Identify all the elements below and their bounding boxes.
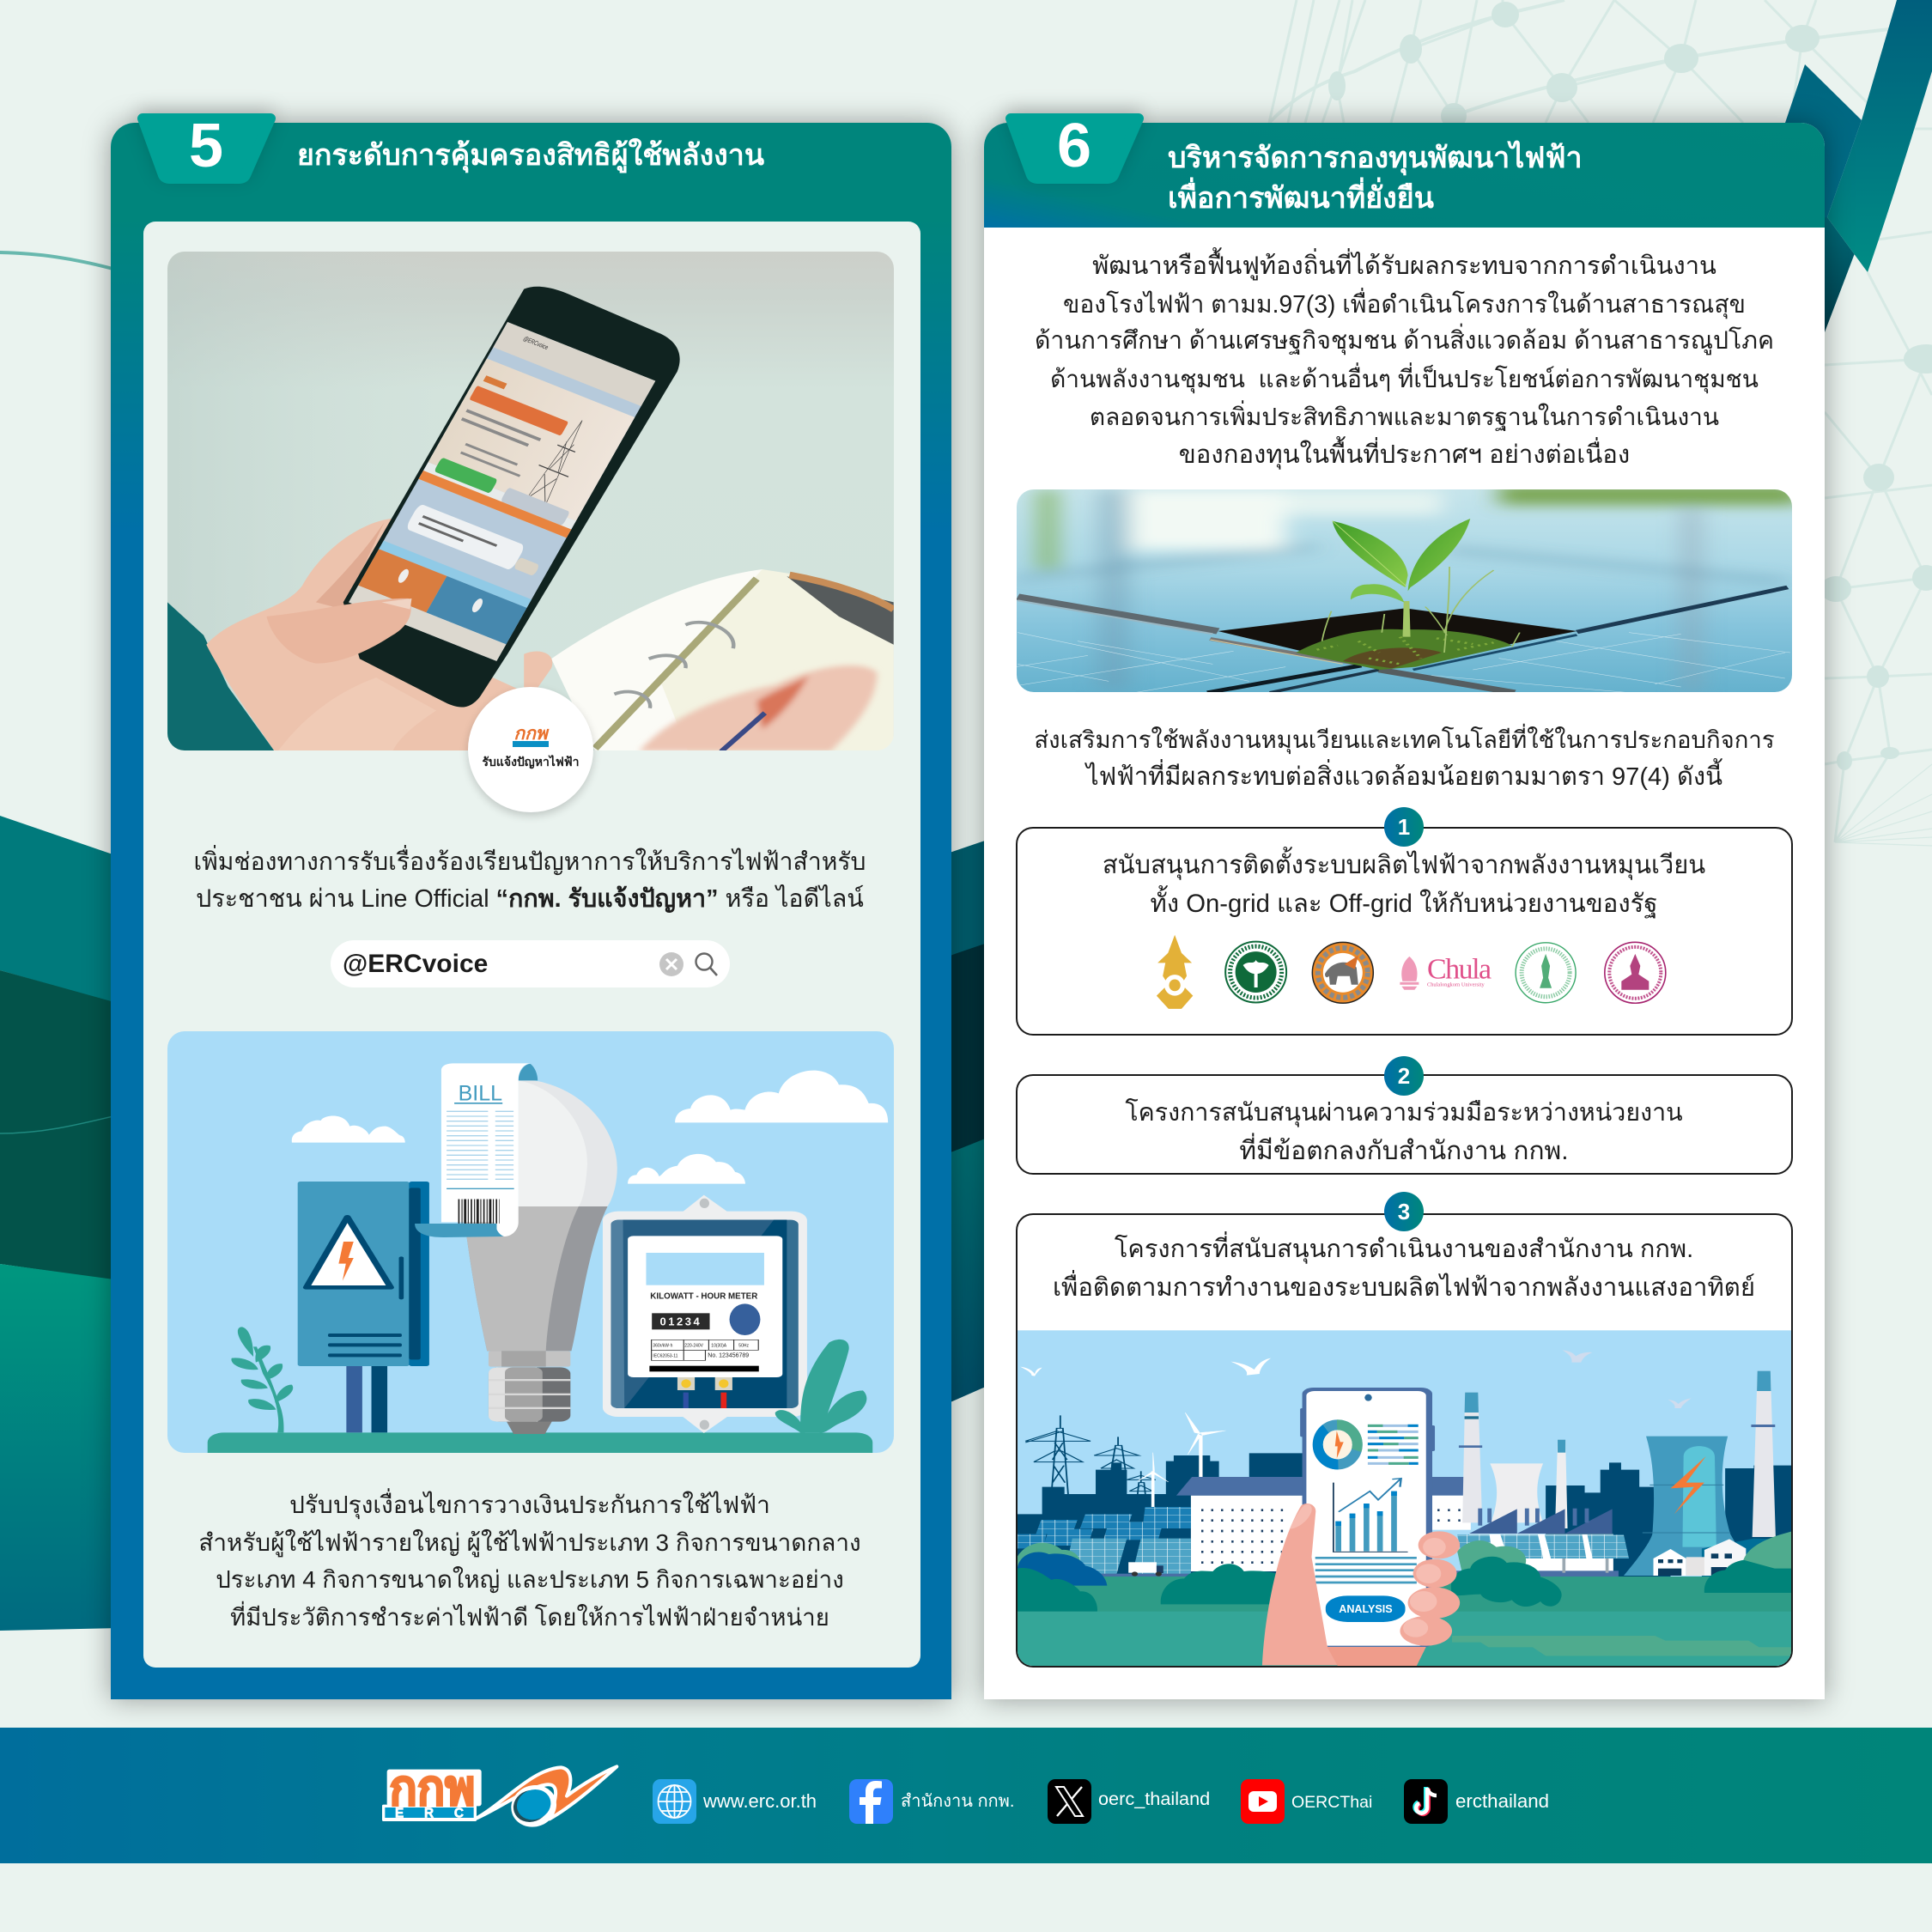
box 2: partner cooperation [1016,1074,1793,1175]
heading: section 5: ยกระดับการคุ้มครองสิทธิผู้ใช้พลังงาน [297,139,764,172]
search bar: @ERCvoice: @ERCvoice [343,950,488,978]
illustration: bill, bulb and meter [167,1031,894,1453]
illustration: bill, bulb and meter: 50Hz [738,1344,749,1349]
badge: number 2 [1384,1056,1424,1096]
text: box 3: เพื่อติดตามการทำงานของระบบผลิตไฟฟ้าจากพลังงานแสงอาทิตย์ [1053,1273,1755,1302]
text: section 5 deposit conditions: ปรับปรุงเงื่อนไขการวางเงินประกันการใช้ไฟฟ้า [289,1492,770,1518]
text: box 3 [1053,1231,1755,1302]
text: section 5 deposit conditions: ที่มีประวัติการชำระค่าไฟฟ้าดี โดยให้การไฟฟ้าฝ่ายจำหน่าย [230,1604,829,1631]
text: section 5 intro: เพิ่มช่องทางการรับเรื่องร้องเรียนปัญหาการให้บริการไฟฟ้าสำหรับ [193,848,866,875]
icon: YouTube [1241,1779,1285,1824]
panel: section 6 [984,123,1825,1699]
text: section 6 intro: ด้านการศึกษา ด้านเศรษฐกิจชุมชน ด้านสิ่งแวดล้อม ด้านสาธารณูปโภค [1035,327,1774,355]
text: section 5 intro [193,845,866,913]
text: section 6 intro: ตลอดจนการเพิ่มประสิทธิภาพและมาตรฐานในการดำเนินงาน [1090,404,1719,430]
box 3: solar monitoring [1016,1213,1793,1668]
text: section 5 deposit conditions [198,1488,861,1631]
photo: seedling among solar panels [1017,489,1792,692]
text: renewable energy promotion: ส่งเสริมการใช้พลังงานหมุนเวียนและเทคโนโลยีที่ใช้ในการประกอบกิจการ [1034,726,1775,753]
logo: ERC: กกพ [389,1761,475,1815]
box 1: renewable systems for state agencies [1016,827,1793,1036]
icon: X [1048,1779,1091,1824]
badge: number 6: 6 [1057,112,1091,180]
icon: website [653,1779,696,1824]
text: box 2: โครงการสนับสนุนผ่านความร่วมมือระหว่างหน่วยงาน [1125,1099,1683,1127]
panel: section 5 [111,123,951,1699]
logo badge: รับแจ้งปัญหาไฟฟ้า: กกพ [513,724,548,744]
badge: number 3: 3 [1398,1199,1410,1224]
logos: six partner agencies: Chulalongkorn University [1427,981,1485,987]
text: section 6 intro: ของกองทุนในพื้นที่ประกาศฯ อย่างต่อเนื่อง [1179,440,1630,469]
badge: number 5 [134,100,279,184]
text: box 2: ที่มีข้อตกลงกับสำนักงาน กกพ. [1239,1137,1569,1165]
text: TikTok: ercthailand [1455,1790,1549,1812]
text: section 6 intro: ด้านพลังงานชุมชน และด้านอื่นๆ ที่เป็นประโยชน์ต่อการพัฒนาชุมชน [1050,366,1759,392]
illustration: bill, bulb and meter: IEC62053-11 [653,1354,678,1359]
illustration: bill, bulb and meter: 01234 [660,1315,702,1327]
badge: number 5: 5 [189,112,223,180]
logo badge: รับแจ้งปัญหาไฟฟ้า [468,687,593,812]
logo: ERC [382,1761,618,1827]
badge: number 1 [1384,807,1424,847]
illustration: city energy analysis: ANALYSIS [1339,1602,1392,1615]
text: section 5 deposit conditions: สำหรับผู้ใช้ไฟฟ้ารายใหญ่ ผู้ใช้ไฟฟ้าประเภท 3 กิจการขนาดกลาง [198,1529,861,1556]
photo: hand holding phone: @ERCvoice [522,336,550,351]
badge: number 6 [1001,100,1147,184]
photo: hand holding phone [167,252,894,750]
text: renewable energy promotion [1034,723,1775,791]
text: renewable energy promotion: ไฟฟ้าที่มีผลกระทบต่อสิ่งแวดล้อมน้อยตามมาตรา 97(4) ดังนี้ [1086,763,1722,791]
logos: six partner agencies [1157,934,1667,1009]
illustration: bill, bulb and meter: 360r/kW·h [653,1344,673,1349]
text: section 5 intro: ประชาชน ผ่าน Line Official “กกพ. รับแจ้งปัญหา” หรือ ไอดีไลน์ [196,885,864,913]
panel: section 6 header band [984,123,1825,228]
heading: section 6 [1168,141,1583,215]
illustration: city energy analysis [1018,1330,1791,1666]
text: website: www.erc.or.th [703,1790,817,1812]
badge: number 2: 2 [1398,1063,1410,1089]
text: facebook: สำนักงาน กกพ. [901,1792,1014,1811]
illustration: bill, bulb and meter: 10(30)A [711,1344,727,1349]
logo badge: รับแจ้งปัญหาไฟฟ้า: รับแจ้งปัญหาไฟฟ้า [482,755,580,769]
text: YouTube: OERCThai [1291,1793,1372,1812]
text: section 6 intro [1035,247,1774,470]
heading: section 6: บริหารจัดการกองทุนพัฒนาไฟฟ้า [1168,142,1583,174]
search bar: @ERCvoice [331,940,730,987]
illustration: bill, bulb and meter: 220-240V [684,1344,704,1349]
text: box 1: ทั้ง On-grid และ Off-grid ให้กับหน่วยงานของรัฐ [1150,890,1658,918]
badge: number 1: 1 [1398,814,1410,840]
logo: ERC: ERC [395,1807,464,1821]
panel: section 5 inner card [143,222,920,1668]
text: section 6 intro: พัฒนาหรือฟื้นฟูท้องถิ่นที่ได้รับผลกระทบจากการดำเนินงาน [1092,252,1716,280]
footer band [0,1728,1932,1863]
text: box 1: สนับสนุนการติดตั้งระบบผลิตไฟฟ้าจากพลังงานหมุนเวียน [1103,852,1705,879]
text: X: oerc_thailand [1098,1788,1210,1809]
text: section 5 deposit conditions: ประเภท 4 กิจการขนาดใหญ่ และประเภท 5 กิจการเฉพาะอย่าง [216,1566,844,1593]
icon: facebook [849,1779,893,1824]
badge: number 3 [1384,1192,1424,1231]
text: box 3: โครงการที่สนับสนุนการดำเนินงานของสำนักงาน กกพ. [1115,1236,1693,1263]
illustration: bill, bulb and meter: KILOWATT - HOUR METER [650,1291,757,1301]
icon: TikTok [1404,1779,1448,1824]
illustration: bill, bulb and meter: BILL [459,1082,502,1106]
text: box 1 [1103,847,1705,919]
text: box 2 [1125,1098,1683,1165]
text: section 6 intro: ของโรงไฟฟ้า ตามม.97(3) เพื่อดำเนินโครงการในด้านสาธารณสุข [1063,290,1746,318]
heading: section 6: เพื่อการพัฒนาที่ยั่งยืน [1168,182,1434,215]
illustration: bill, bulb and meter: No. 123456789 [708,1353,749,1359]
logos: six partner agencies: Chula [1427,954,1492,986]
